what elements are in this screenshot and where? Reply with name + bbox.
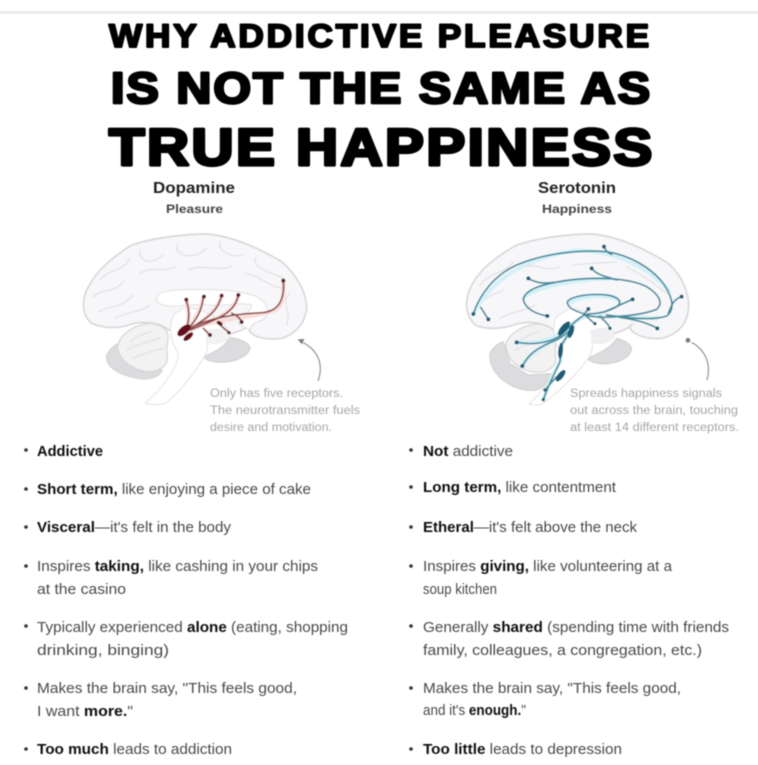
panel: serotonin list: Etheral—it's felt above the neck — [423, 520, 638, 536]
serotonin caption: at least 14 different receptors. — [570, 422, 739, 434]
panel: dopamine list: I want more. " — [37, 704, 133, 720]
serotonin caption — [570, 388, 739, 434]
arrow: serotonin callout — [686, 338, 708, 380]
panel: dopamine list: Inspires taking, like cashing in your chips — [37, 559, 318, 575]
panel: dopamine heading — [153, 180, 235, 216]
panel: dopamine list: Makes the brain say, "This feels good, — [37, 681, 297, 697]
panel: serotonin list — [409, 444, 729, 758]
panel: dopamine list: at the casino — [37, 582, 126, 598]
dopamine caption: Only has five receptors. — [210, 388, 343, 400]
panel: serotonin list: Generally shared (spending time with friends — [423, 620, 729, 636]
panel: serotonin list: Long term, like contentment — [423, 480, 616, 496]
panel: dopamine list: Short term, like enjoying a piece of cake — [37, 482, 311, 498]
panel: serotonin list: soup kitchen — [423, 582, 497, 598]
panel: serotonin list: family, colleagues, a congregation, etc.) — [423, 643, 702, 659]
panel: serotonin list: Makes the brain say, "This feels good, — [423, 681, 681, 697]
panel: serotonin heading — [538, 180, 616, 216]
panel: dopamine heading: Dopamine — [153, 180, 235, 197]
title: TRUE HAPPINESS — [109, 118, 652, 176]
panel: serotonin heading: Serotonin — [538, 180, 616, 197]
panel: dopamine list: Typically experienced alone (eating, shopping — [37, 620, 348, 636]
panel: serotonin list: and it's enough." — [423, 703, 526, 719]
panel: dopamine list: drinking, binging) — [37, 643, 169, 659]
icon: dopamine brain — [83, 234, 320, 405]
panel: serotonin heading: Happiness — [542, 202, 612, 216]
panel: serotonin list: Inspires giving, like volunteering at a — [423, 559, 673, 575]
dopamine caption: The neurotransmitter fuels — [210, 405, 360, 417]
panel: dopamine list: Too much leads to addiction — [37, 742, 232, 758]
icon: serotonin brain — [467, 234, 708, 405]
panel: serotonin list: Not addictive — [423, 444, 513, 460]
bullet dots: dopamine — [24, 448, 28, 751]
dopamine caption: desire and motivation. — [210, 422, 332, 434]
panel: dopamine heading: Pleasure — [166, 202, 223, 216]
panel: serotonin list: Too little leads to depression — [423, 742, 622, 758]
panel: dopamine list — [24, 444, 348, 758]
serotonin caption: Spreads happiness signals — [570, 388, 722, 400]
panel: dopamine list: Addictive — [37, 444, 103, 460]
panel: dopamine list: Visceral—it's felt in the body — [37, 520, 232, 536]
title — [109, 19, 652, 176]
bullet dots: serotonin — [409, 448, 413, 751]
dopamine caption — [210, 388, 360, 434]
serotonin caption: out across the brain, touching — [570, 405, 738, 417]
arrow: dopamine callout — [298, 339, 320, 381]
title: WHY ADDICTIVE PLEASURE — [109, 19, 649, 55]
title: IS NOT THE SAME AS — [111, 63, 650, 113]
